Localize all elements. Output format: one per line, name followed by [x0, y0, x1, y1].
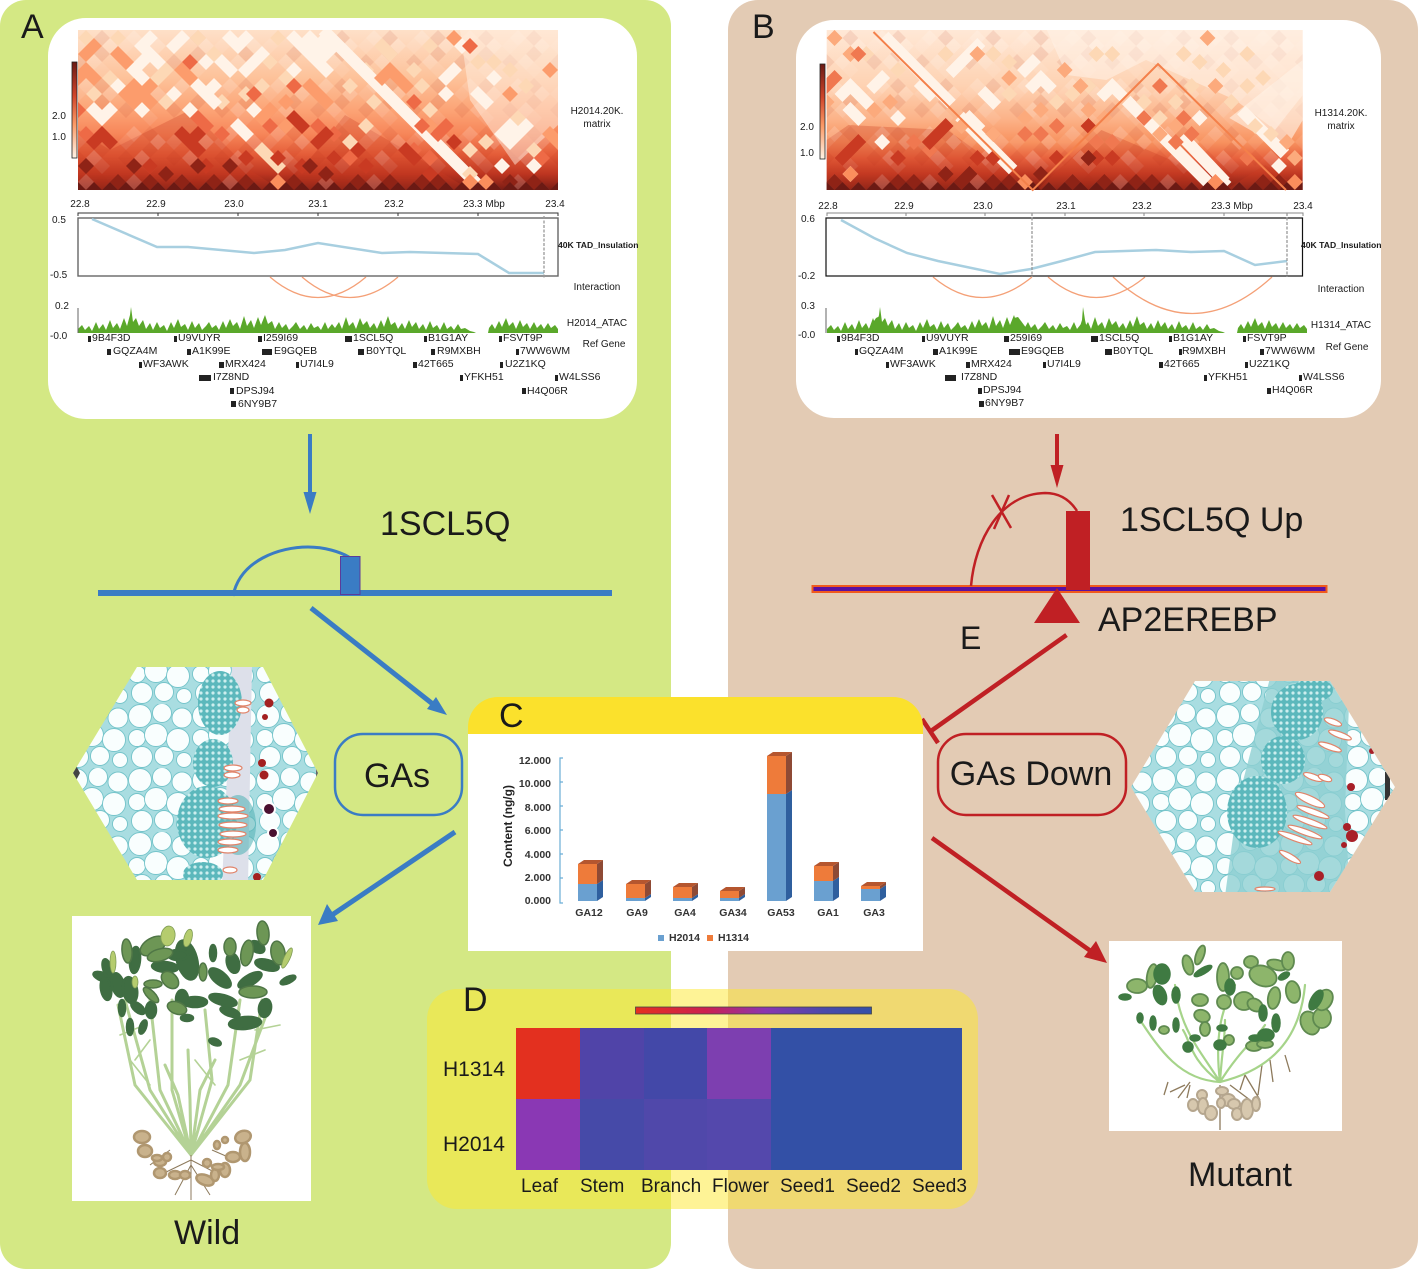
gene track A: B1G1AY	[428, 332, 468, 344]
genomic axis B: 23.1	[1056, 201, 1076, 212]
genomic axis A	[70, 199, 565, 216]
ATAC track B	[798, 301, 1371, 341]
interaction arcs B	[933, 277, 1364, 314]
gene track B: B1G1AY	[1173, 332, 1213, 344]
matrix label B: H1314.20K.	[1315, 108, 1367, 119]
genomic axis A: 23.3 Mbp	[463, 199, 505, 210]
row labels	[443, 1058, 505, 1156]
genomic axis B: 23.3 Mbp	[1211, 201, 1253, 212]
colour scale A	[72, 62, 77, 158]
gene track B: 42T665	[1164, 358, 1200, 370]
gene track B: WF3AWK	[890, 358, 936, 370]
gene track B: R9MXBH	[1182, 345, 1226, 357]
gene track B: Ref Gene	[1326, 342, 1369, 353]
gene track A: U2Z1KQ	[505, 358, 546, 370]
insulation track B	[798, 213, 1382, 282]
column labels	[521, 1176, 967, 1197]
gene track A: FSVT9P	[503, 332, 543, 344]
panel letter A: A	[21, 8, 44, 46]
gene track B: E9GQEB	[1021, 345, 1064, 357]
heading: 1SCL5Q: 1SCL5Q	[380, 505, 510, 543]
panel letter C: C	[499, 697, 524, 735]
gene track B: FSVT9P	[1247, 332, 1287, 344]
genomic axis B: 22.8	[818, 201, 838, 212]
category labels: GA1	[817, 907, 839, 919]
label box: GAs	[335, 734, 462, 815]
panel letter B: B	[752, 8, 775, 46]
gene track A: 6NY9B7	[238, 398, 277, 410]
matrix label B: matrix	[1327, 121, 1355, 132]
micrograph: mutant stem section	[1128, 678, 1398, 896]
category labels	[575, 907, 885, 919]
colour scale labels B: 1.0	[800, 148, 814, 159]
panel B: genome browser card	[796, 20, 1382, 418]
legend	[658, 932, 749, 944]
gene track A: W4LSS6	[559, 371, 601, 383]
gene track A	[88, 332, 626, 410]
gene track A: H4Q06R	[527, 385, 568, 397]
gene track B: H4Q06R	[1272, 384, 1313, 396]
insulation track B: -0.2	[798, 271, 816, 282]
insulation track A: 40K TAD_Insulation	[558, 240, 639, 250]
y axis: 12.000	[519, 755, 551, 767]
heatmap A	[70, 30, 566, 190]
arrow: GA chart to wild plant	[318, 832, 455, 925]
illustration: mutant plant	[1109, 941, 1342, 1131]
row labels: H1314	[443, 1058, 505, 1081]
interaction arcs B: Interaction	[1318, 284, 1364, 295]
genomic axis A: 23.2	[384, 199, 404, 210]
insulation track A: -0.5	[50, 270, 68, 281]
genomic axis A: 23.4	[545, 199, 565, 210]
genomic axis B	[818, 201, 1313, 216]
heatmap cells	[516, 1028, 962, 1170]
matrix label A: matrix	[583, 119, 611, 130]
category labels: GA9	[626, 907, 648, 919]
micrograph: wild stem section	[70, 660, 320, 886]
category labels: GA34	[719, 907, 747, 919]
gene track B: U7I4L9	[1047, 358, 1081, 370]
ATAC track B: -0.0	[798, 330, 816, 341]
panel: wild background	[0, 0, 671, 1269]
gene track B: I7Z8ND	[961, 371, 998, 383]
gene track A: A1K99E	[192, 345, 231, 357]
panel letter D: D	[463, 981, 488, 1019]
gene track A: 42T665	[418, 358, 454, 370]
gene track B: YFKH51	[1208, 371, 1248, 383]
y axis: 10.000	[519, 778, 551, 790]
gene track A: R9MXBH	[437, 345, 481, 357]
genomic axis B: 23.2	[1132, 201, 1152, 212]
gene track B: A1K99E	[939, 345, 978, 357]
matrix label A	[571, 106, 623, 130]
gene model: wild	[98, 547, 612, 596]
genomic axis A: 22.8	[70, 199, 90, 210]
gene track A: E9GQEB	[274, 345, 317, 357]
arrow: AP2EREBP input to gene	[1050, 434, 1064, 488]
insulation track A: 0.5	[52, 215, 66, 226]
genomic axis B: 22.9	[894, 201, 914, 212]
ATAC track A	[50, 301, 627, 342]
gene track A: Ref Gene	[583, 339, 626, 350]
heatmap B	[819, 30, 1303, 190]
y axis: 6.000	[525, 825, 551, 837]
gene track B: 7WW6WM	[1265, 345, 1315, 357]
expression scale bar	[636, 1007, 872, 1014]
legend: H2014	[669, 932, 700, 944]
gene track A: B0YTQL	[366, 345, 406, 357]
gene track B: 1SCL5Q	[1099, 332, 1139, 344]
gene track A: MRX424	[225, 358, 266, 370]
category labels: GA4	[674, 907, 696, 919]
gene track A: U9VUYR	[178, 332, 221, 344]
insulation track B: 0.6	[801, 214, 815, 225]
gene track A: 1SCL5Q	[353, 332, 393, 344]
column labels: Seed2	[846, 1176, 901, 1197]
interaction arcs A	[270, 277, 620, 298]
panel: mutant background	[728, 0, 1418, 1269]
y axis: 2.000	[525, 872, 551, 884]
gene track A: DPSJ94	[236, 385, 275, 397]
label: AP2EREBP: AP2EREBP	[1098, 601, 1278, 639]
genomic axis A: 23.1	[308, 199, 328, 210]
gene track B: W4LSS6	[1303, 371, 1345, 383]
gene track B	[837, 332, 1369, 409]
gene model: mutant	[812, 493, 1326, 623]
panel C: GA content chart	[468, 697, 923, 951]
label: Wild: Wild	[174, 1214, 240, 1252]
insulation track B: 40K TAD_Insulation	[1301, 240, 1382, 250]
genomic axis A: 23.0	[224, 199, 244, 210]
gene track A: 7WW6WM	[520, 345, 570, 357]
column labels: Seed3	[912, 1176, 967, 1197]
label box: GAs Down	[938, 734, 1126, 815]
genomic axis B: 23.0	[973, 201, 993, 212]
gene track A: GQZA4M	[113, 345, 157, 357]
arrow: gene to GA chart	[311, 608, 447, 715]
y axis: 4.000	[525, 849, 551, 861]
stacked bars	[578, 752, 886, 901]
ATAC track A: 0.2	[55, 301, 69, 312]
colour scale labels A	[52, 111, 66, 143]
y axis: Content (ng/g)	[501, 785, 515, 867]
y axis	[501, 755, 563, 907]
colour scale labels A: 2.0	[52, 111, 66, 122]
gene track A: U7I4L9	[300, 358, 334, 370]
y axis: 0.000	[525, 895, 551, 907]
illustration: wild plant	[72, 916, 311, 1201]
arrow: A card to gene	[304, 434, 316, 514]
gene track A: I7Z8ND	[213, 371, 250, 383]
gene track B: U9VUYR	[926, 332, 969, 344]
label: E: E	[960, 620, 981, 656]
gene track B: B0YTQL	[1113, 345, 1153, 357]
ATAC track B: H1314_ATAC	[1311, 320, 1371, 331]
gene track B: GQZA4M	[859, 345, 903, 357]
matrix label B	[1315, 108, 1367, 132]
colour scale labels B: 2.0	[800, 122, 814, 133]
column labels: Flower	[712, 1176, 770, 1197]
TAD boundary outlines B	[874, 32, 1286, 190]
column labels: Seed1	[780, 1176, 835, 1197]
y axis: 8.000	[525, 802, 551, 814]
matrix label A: H2014.20K.	[571, 106, 623, 117]
category labels: GA12	[575, 907, 603, 919]
gene track B: 259I69	[1010, 332, 1042, 344]
label: Mutant: Mutant	[1188, 1156, 1292, 1194]
gene track A: 9B4F3D	[92, 332, 131, 344]
genomic axis A: 22.9	[146, 199, 166, 210]
category labels: GA53	[767, 907, 795, 919]
colour scale labels B	[800, 122, 814, 159]
ATAC track A: H2014_ATAC	[567, 318, 627, 329]
gene track A: WF3AWK	[143, 358, 189, 370]
label box: GAs Down: GAs Down	[950, 755, 1112, 793]
gene track B: 9B4F3D	[841, 332, 880, 344]
category labels: GA3	[863, 907, 885, 919]
panel A: genome browser card	[48, 18, 639, 419]
colour scale B	[820, 64, 825, 159]
row labels: H2014	[443, 1133, 505, 1156]
gene track B: U2Z1KQ	[1249, 358, 1290, 370]
panel D: tissue expression heatmap	[427, 981, 978, 1209]
genomic axis B: 23.4	[1293, 201, 1313, 212]
label box: GAs: GAs	[364, 757, 430, 795]
legend: H1314	[718, 932, 749, 944]
ATAC track B: 0.3	[801, 301, 815, 312]
gene track A: I259I69	[263, 332, 298, 344]
interaction arcs A: Interaction	[574, 282, 620, 293]
column labels: Leaf	[521, 1176, 559, 1197]
ATAC track A: -0.0	[50, 331, 68, 342]
colour scale labels A: 1.0	[52, 132, 66, 143]
gene track B: 6NY9B7	[985, 397, 1024, 409]
inhibition line: GAs Down to AP2EREBP	[922, 635, 1066, 743]
gene track A: YFKH51	[464, 371, 504, 383]
heading: 1SCL5Q Up: 1SCL5Q Up	[1120, 501, 1303, 539]
insulation track A	[50, 215, 639, 281]
gene track B: MRX424	[971, 358, 1012, 370]
gene track B: DPSJ94	[983, 384, 1022, 396]
column labels: Stem	[580, 1176, 624, 1197]
column labels: Branch	[641, 1176, 701, 1197]
arrow: GA chart to mutant plant	[932, 838, 1107, 963]
